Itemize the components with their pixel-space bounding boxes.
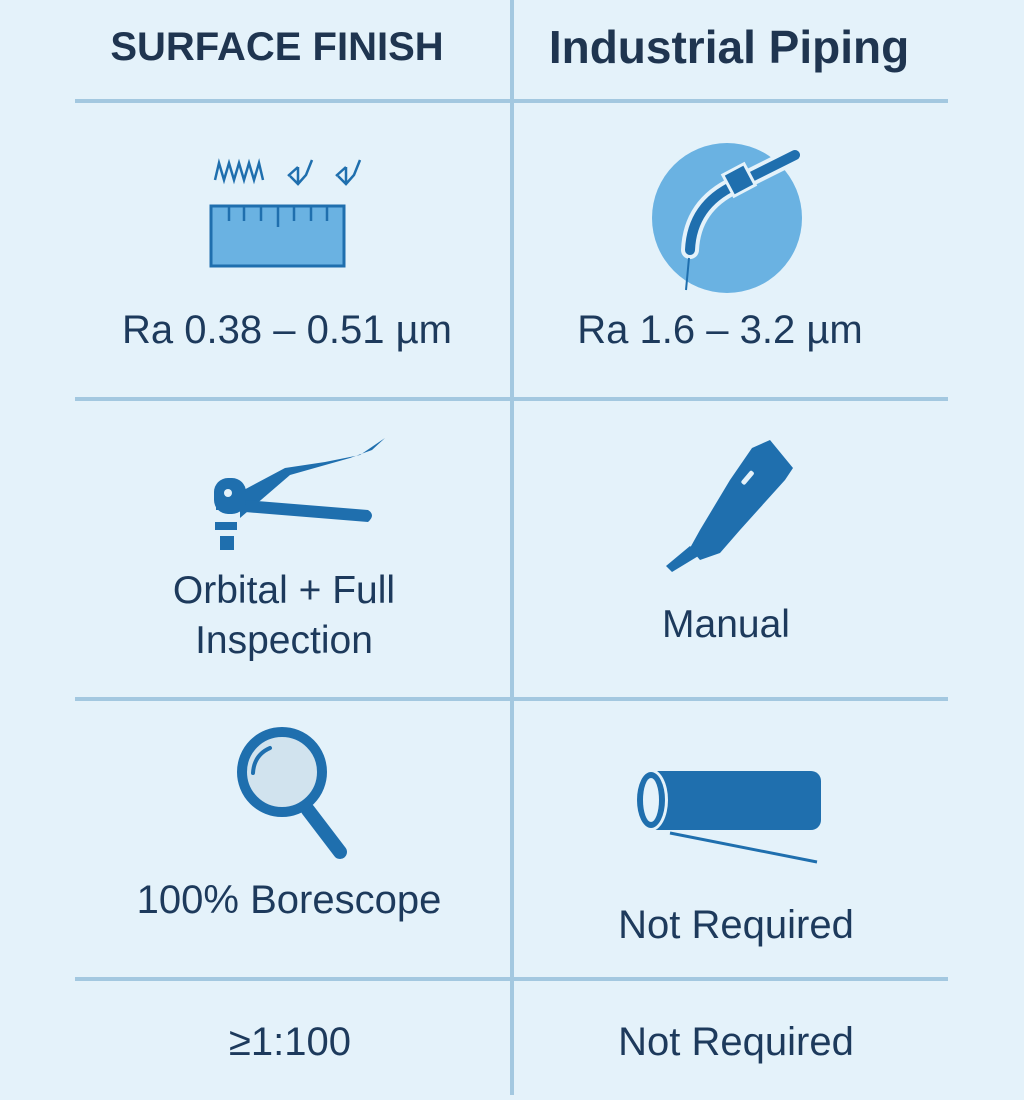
icon: orbital welder <box>214 438 385 550</box>
text: orbital: Inspection <box>195 619 373 662</box>
text: ratio: ≥1:100 <box>229 1020 351 1064</box>
icon: ruler with roughness <box>211 160 360 266</box>
text: orbital <box>173 569 395 662</box>
text: not required 2: Not Required <box>618 1020 854 1064</box>
heading: industrial piping: Industrial Piping <box>549 21 909 73</box>
text: borescope: 100% Borescope <box>137 878 441 922</box>
text: Ra right: Ra 1.6 – 3.2 µm <box>577 308 863 352</box>
text: Ra left: Ra 0.38 – 0.51 µm <box>122 308 452 352</box>
text: manual: Manual <box>662 603 790 646</box>
icon: magnifier <box>242 732 340 852</box>
text: orbital: Orbital + Full <box>173 569 395 612</box>
heading: surface finish: SURFACE FINISH <box>110 25 444 69</box>
text: not required 1: Not Required <box>618 903 854 947</box>
icon: welding torch in circle <box>652 143 802 293</box>
icon: pipe <box>634 769 821 862</box>
icon: manual torch <box>666 440 793 572</box>
